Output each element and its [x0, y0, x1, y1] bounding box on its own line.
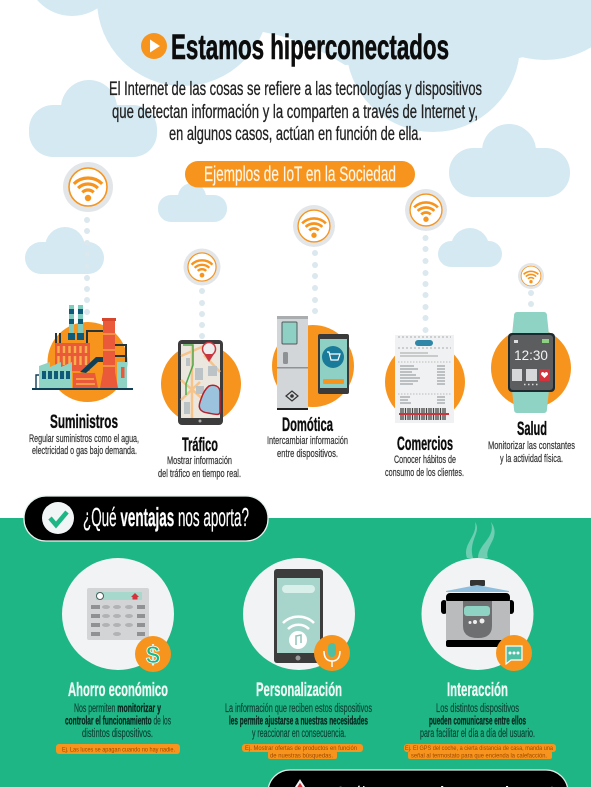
- icon: smart pot with chat badge: [422, 558, 534, 671]
- label: suministros: electricidad o gas bajo demanda.: [32, 445, 137, 457]
- text: personalizacion: La información que reciben estos dispositivos: [225, 703, 372, 715]
- text: ahorro economico: [65, 680, 171, 740]
- icon: wifi suministros: [63, 162, 113, 212]
- connector dots: trafico: [199, 288, 205, 339]
- label: comercios: consumo de los clientes.: [385, 467, 464, 479]
- icon: phone with map: [161, 340, 241, 425]
- intro text: en algunos casos, actúan en función de ella.: [169, 124, 422, 145]
- text: personalizacion: y reaccionar en consecuencia.: [252, 728, 346, 740]
- icon: phone with wifi and mic badge: [243, 558, 355, 671]
- heading pill: advantages: [24, 496, 268, 541]
- cloud: lower left: [25, 227, 104, 274]
- label: domotica: Domótica: [282, 415, 333, 436]
- example note: ahorro: [56, 744, 180, 754]
- section pill: examples: Ejemplos de IoT en la Sociedad: [204, 163, 396, 186]
- panel: advantages background: [0, 518, 591, 787]
- label: comercios: [385, 434, 464, 479]
- label: domotica: Intercambiar información: [267, 435, 348, 447]
- icon: wifi domotica: [293, 205, 335, 247]
- cloud: small centre: [158, 183, 227, 222]
- heading pill: drawbacks, cut by page edge: [268, 770, 568, 787]
- example note: interaccion: [404, 744, 556, 760]
- example note: ahorro: Ej. Las luces se apagan cuando no hay nadie.: [62, 746, 175, 754]
- icon: control panel with savings badge: $: [146, 641, 160, 669]
- icon: smartwatch: [491, 312, 571, 413]
- connector dots: suministros: [84, 217, 90, 315]
- connector dots: salud: [528, 290, 534, 307]
- label: suministros: Suministros: [50, 412, 118, 433]
- text: personalizacion: [225, 680, 372, 740]
- example note: personalizacion: de nuestras búsquedas.: [270, 752, 333, 760]
- icon: receipt: [385, 335, 465, 423]
- label: suministros: [29, 412, 139, 457]
- top cloud banner: [26, 0, 591, 132]
- example note: interaccion: Ej. El GPS del coche, a cierta distancia de casa, manda una: [405, 745, 553, 752]
- icon: factory: [32, 305, 133, 402]
- label: comercios: Conocer hábitos de: [394, 454, 456, 466]
- intro text: [109, 79, 482, 145]
- cloud: left: [29, 80, 157, 157]
- example note: interaccion: señal al termostato para que encienda la calefacción.: [411, 752, 547, 760]
- connector dots: comercios: [422, 235, 428, 333]
- icon: wifi salud: [518, 263, 544, 289]
- connector dots: domotica: [312, 250, 318, 314]
- text: interaccion: [420, 680, 535, 740]
- text: ahorro economico: Nos permiten monitorizar y: [74, 703, 161, 715]
- label: trafico: [158, 435, 241, 480]
- icon: smartwatch: 12:30: [514, 348, 548, 363]
- text: personalizacion: Personalización: [256, 680, 342, 701]
- label: salud: Salud: [517, 419, 547, 440]
- example note: personalizacion: Ej. Mostrar ofertas de productos en función: [245, 745, 357, 752]
- label: salud: [488, 419, 575, 465]
- icon: wifi trafico: [184, 248, 220, 286]
- example note: personalizacion: [242, 744, 363, 760]
- icon: steam: [466, 522, 495, 558]
- cloud: right: [449, 124, 570, 197]
- text: personalizacion: les permite ajustarse a nuestras necesidades: [229, 716, 368, 728]
- text: interaccion: Los distintos dispositivos: [436, 703, 519, 715]
- label: domotica: entre dispositivos.: [277, 448, 338, 460]
- label: trafico: Tráfico: [182, 435, 218, 456]
- cloud: lower right: [438, 228, 502, 267]
- text: interaccion: Interacción: [447, 680, 508, 701]
- text: ahorro economico: controlar el funcionamiento de los: [65, 716, 171, 728]
- text: ahorro economico: Ahorro económico: [68, 680, 168, 701]
- label: suministros: Regular suministros como el agua,: [29, 433, 139, 445]
- label: trafico: Mostrar información: [167, 455, 232, 467]
- label: domotica: [267, 415, 348, 460]
- icon: smart fridge and phone: [272, 316, 354, 410]
- icon: wifi comercios: [405, 189, 447, 231]
- text: ahorro economico: distintos dispositivos.: [82, 728, 153, 740]
- label: trafico: del tráfico en tiempo real.: [158, 468, 241, 480]
- section pill: examples: [185, 161, 415, 188]
- heading pill: advantages: ¿Qué ventajas nos aporta?: [83, 502, 249, 532]
- title: [141, 28, 449, 67]
- label: comercios: Comercios: [397, 434, 453, 455]
- icon: control panel with savings badge: [62, 558, 174, 672]
